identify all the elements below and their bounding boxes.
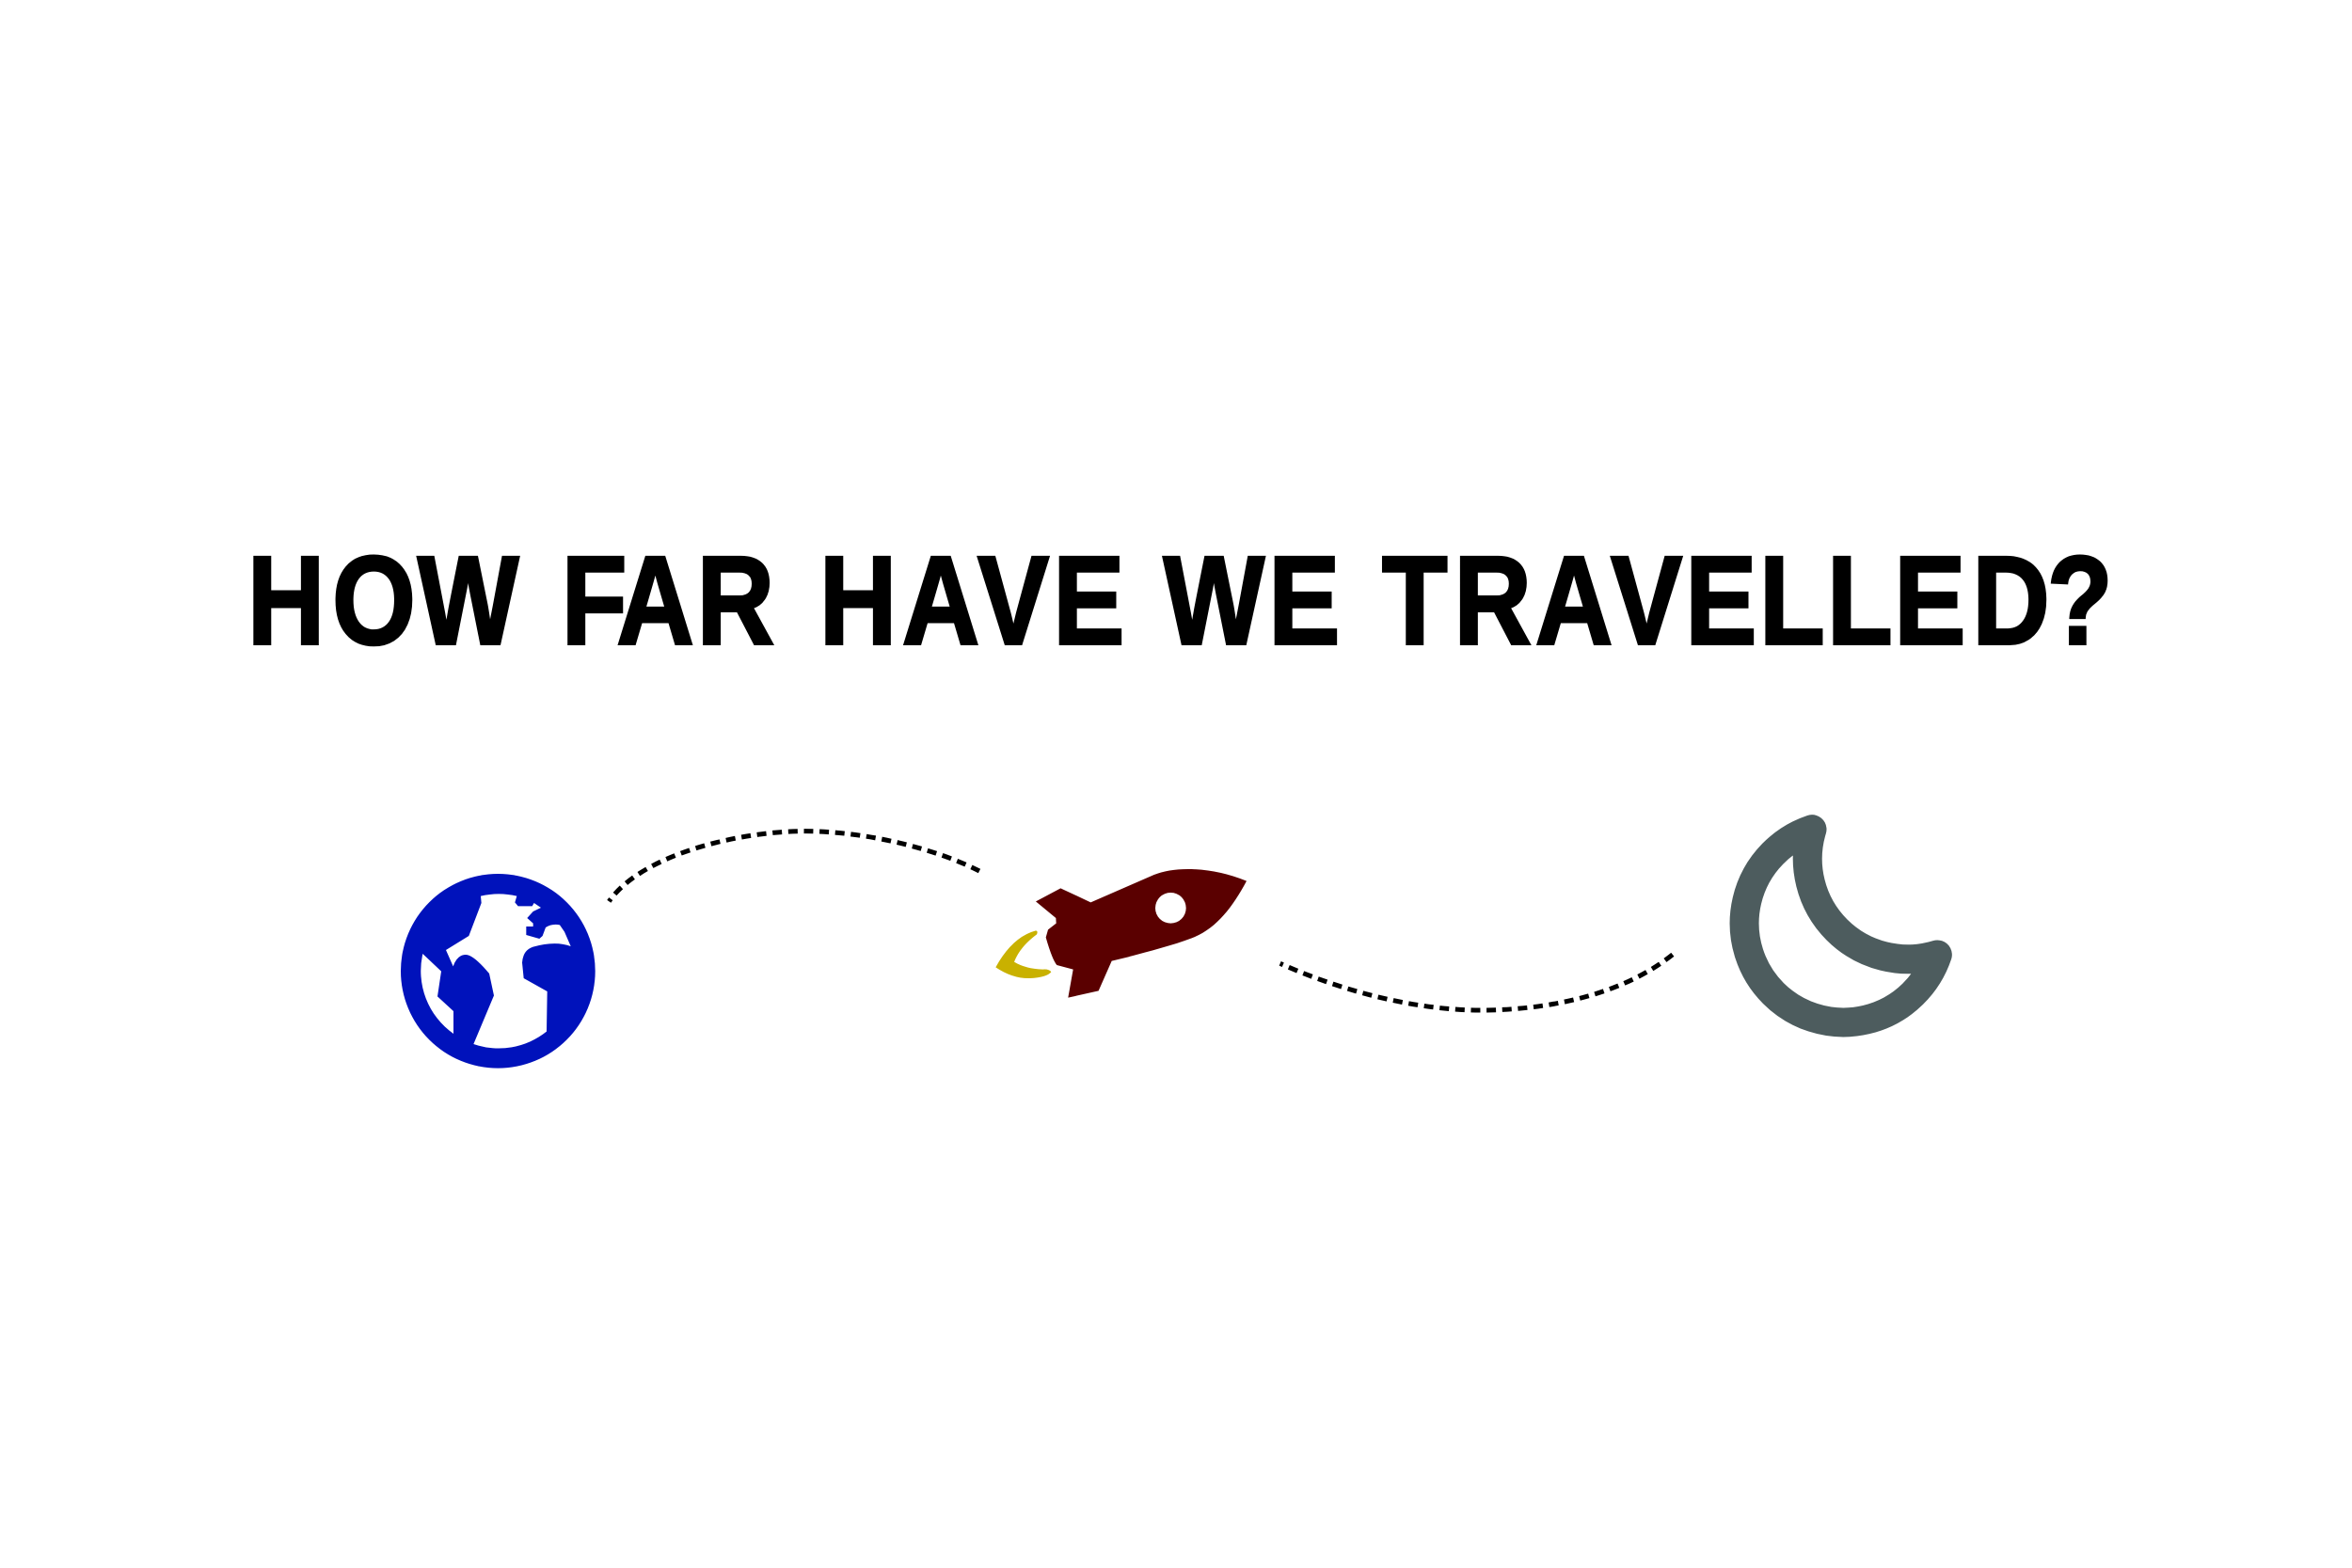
icon: crescent moon: [1744, 830, 1937, 1022]
arrow: dotted path from earth to rocket: [609, 832, 979, 901]
icon: rocket: [995, 869, 1247, 998]
title: HOW FAR HAVE WE TRAVELLED?: [247, 531, 2113, 672]
icon: earth globe: [401, 874, 596, 1069]
arrow: dotted path from rocket to moon: [1280, 952, 1677, 1010]
